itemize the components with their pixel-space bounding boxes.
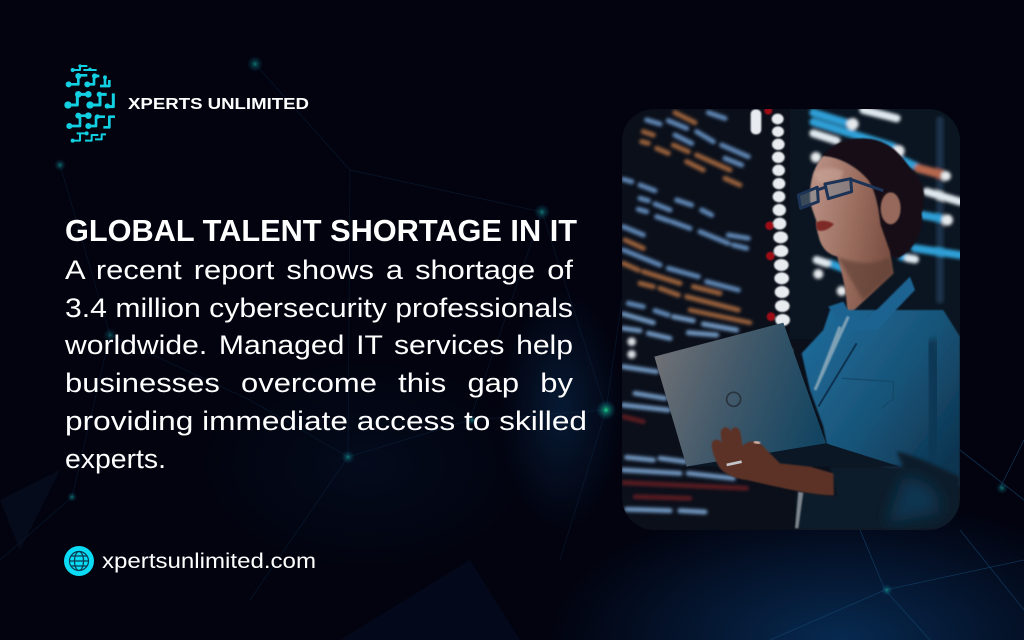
photo: woman with laptop in server room: [622, 107, 960, 530]
woman: [654, 138, 960, 530]
hair: [823, 138, 924, 258]
website url: xpertsunlimited.com: [102, 549, 316, 573]
brand logo: [64, 64, 309, 143]
body paragraph: 3.4 million cybersecurity professionals: [65, 293, 573, 323]
brand name: XPERTS UNLIMITED: [128, 96, 309, 113]
body paragraph: experts.: [65, 444, 166, 474]
body paragraph: A recent report shows a shortage of: [65, 255, 574, 285]
icon: globe badge: [64, 546, 94, 576]
hand and arm: [712, 427, 834, 495]
right screen lights: [811, 110, 960, 300]
body paragraph: [64, 255, 587, 474]
code lines on left screen: [623, 113, 748, 315]
glasses: [798, 179, 883, 208]
heading: GLOBAL TALENT SHORTAGE IN IT: [65, 213, 577, 248]
body paragraph: businesses overcome this gap by: [65, 368, 574, 398]
laptop: [654, 323, 900, 467]
face and neck: [810, 156, 901, 317]
body paragraph: providing immediate access to skilled: [65, 406, 587, 436]
website link: [64, 546, 316, 576]
lower body shadow: [795, 452, 960, 530]
LED column: [751, 107, 793, 388]
shirt: [802, 277, 960, 487]
icon: circuit globe: [64, 64, 115, 143]
body paragraph: worldwide. Managed IT services help: [64, 330, 573, 360]
